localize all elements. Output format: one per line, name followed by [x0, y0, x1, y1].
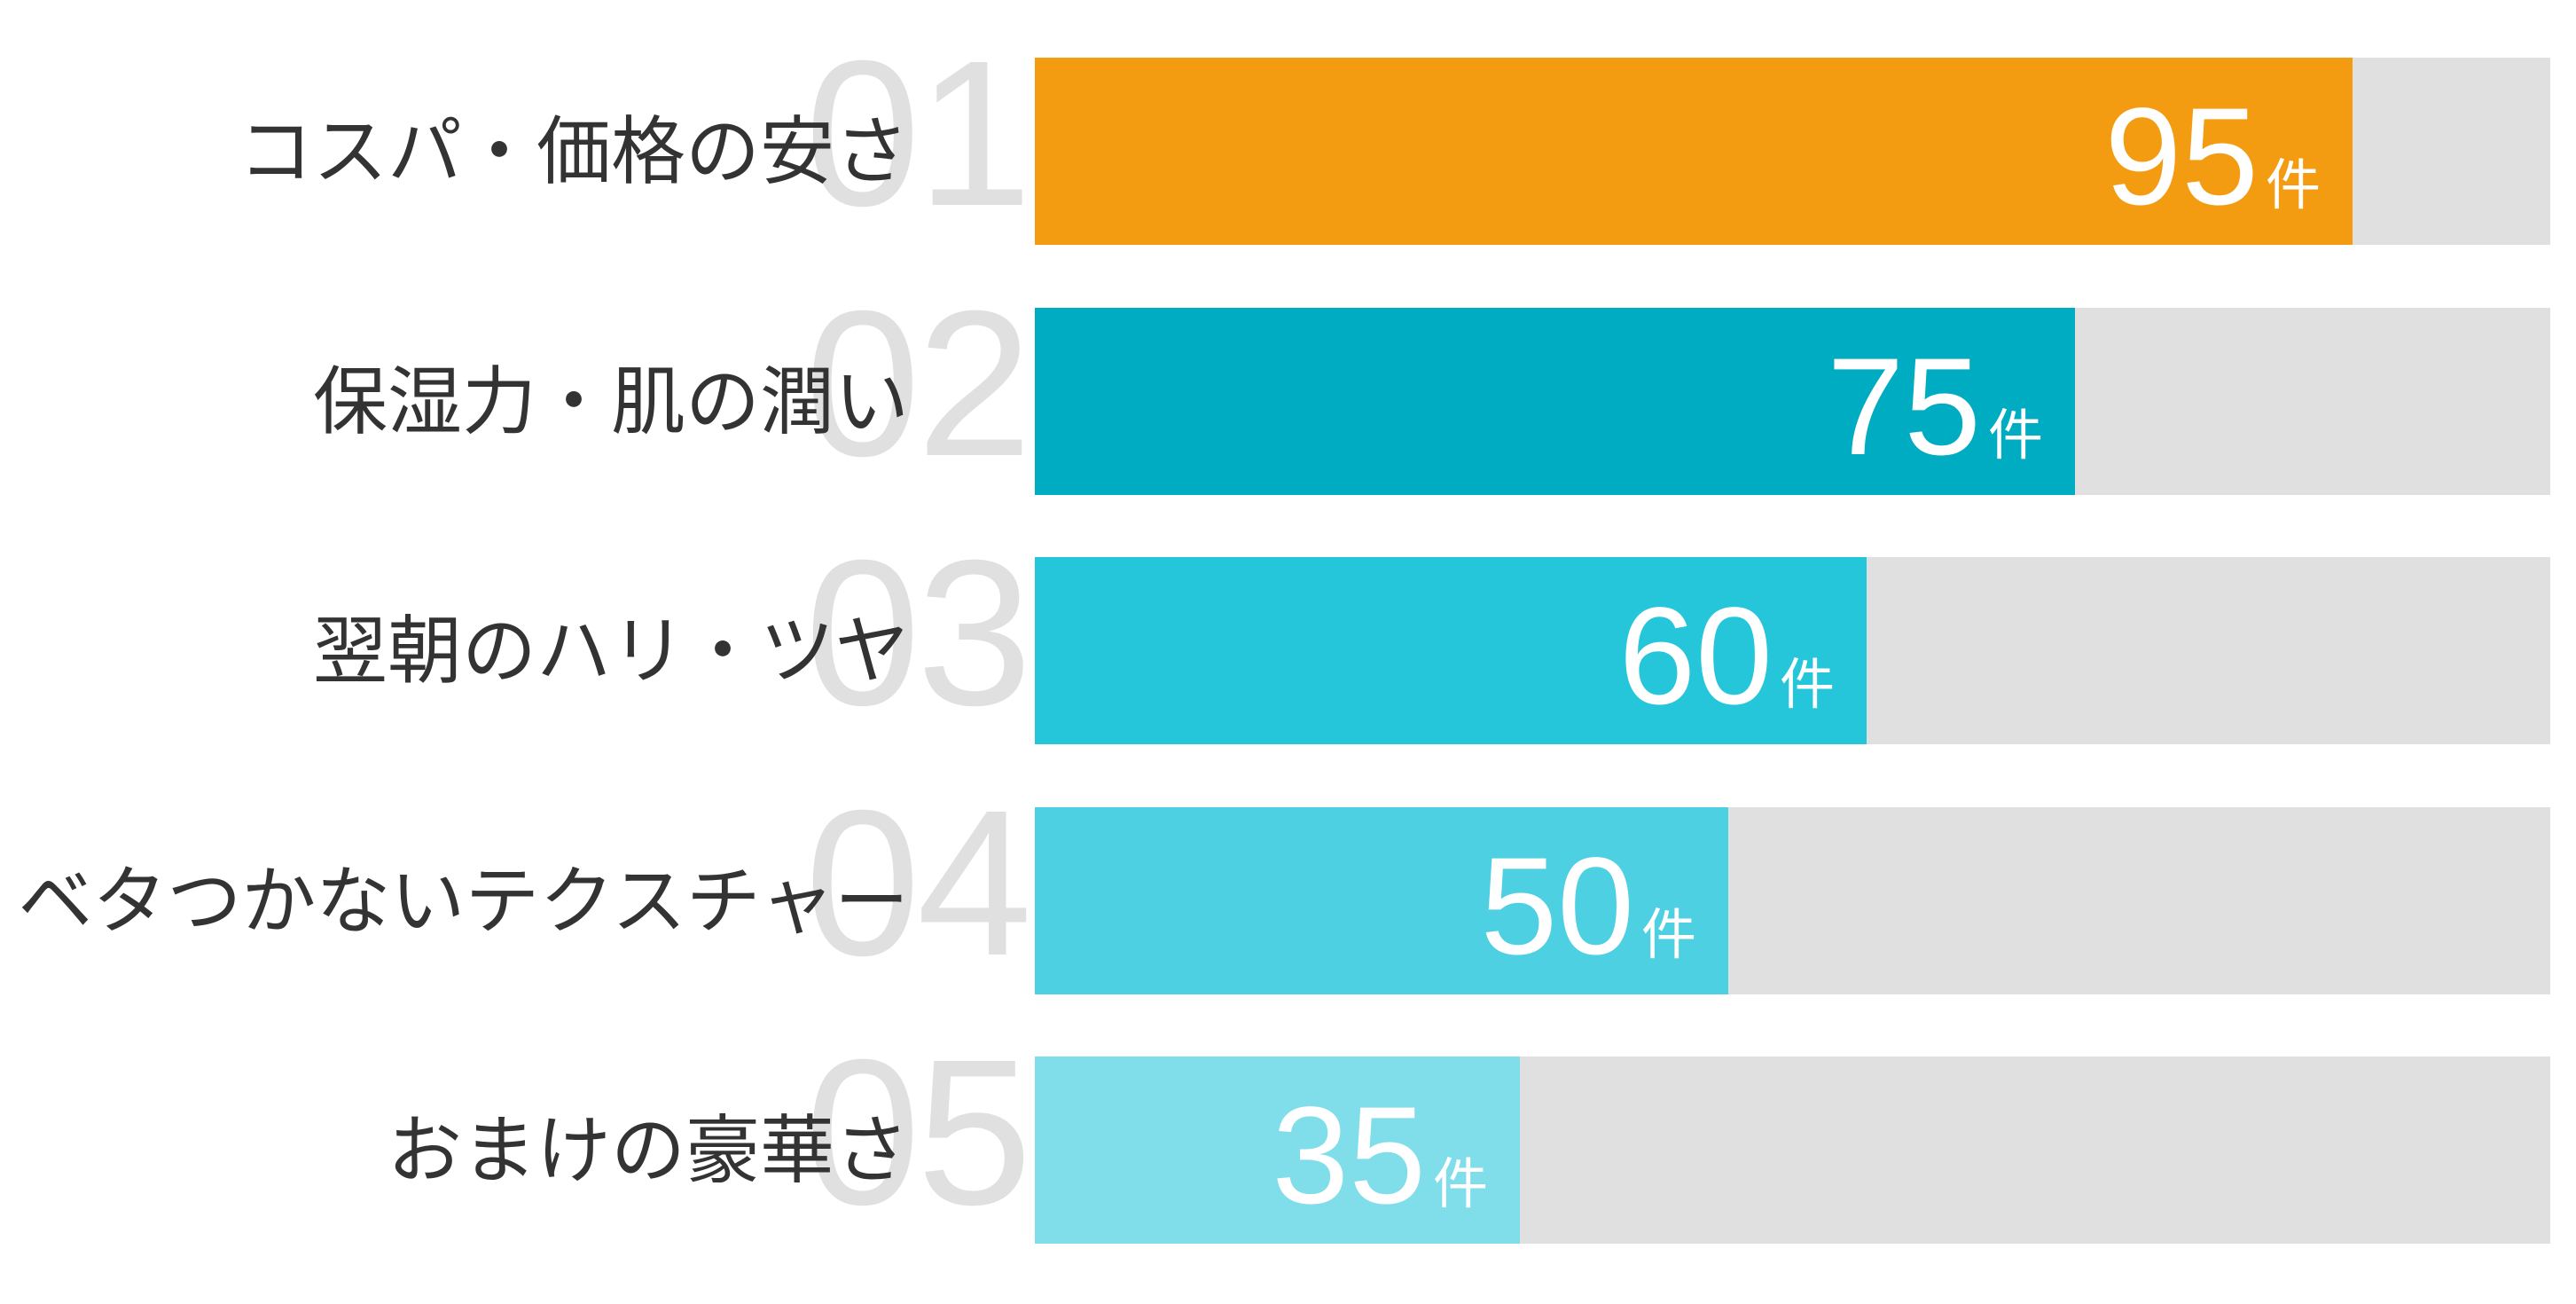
label: ベタつかないテクスチャー [18, 860, 909, 943]
bar 35 [1035, 1057, 2550, 1244]
row 3: firmness [313, 516, 2550, 749]
rank number 04: 04 [805, 766, 1029, 999]
rank number 03: 03 [805, 516, 1029, 749]
label: 翌朝のハリ・ツヤ [313, 609, 909, 693]
bar 35: 35件 [1272, 1079, 1488, 1233]
rank number 01: 01 [805, 17, 1029, 249]
rank number 05: 05 [805, 1016, 1029, 1248]
bar 75: 75件 [1827, 330, 2043, 484]
row 4: texture [18, 766, 2550, 999]
row 1: cost performance [239, 17, 2550, 249]
bar 60: 60件 [1618, 579, 1835, 734]
label: 保湿力・肌の潤い [313, 360, 909, 444]
row 2: moisture [313, 267, 2550, 499]
label: おまけの豪華さ [388, 1109, 909, 1192]
rank number 02: 02 [805, 267, 1029, 499]
row 5: extras [388, 1016, 2550, 1248]
bar 50: 50件 [1480, 829, 1696, 984]
bar 75 [1035, 308, 2550, 495]
bar 60 [1035, 557, 2550, 744]
bar 95: 95件 [2104, 80, 2321, 234]
bar 50 [1035, 807, 2550, 994]
bar 95 [1035, 58, 2550, 245]
label: コスパ・価格の安さ [239, 110, 909, 193]
